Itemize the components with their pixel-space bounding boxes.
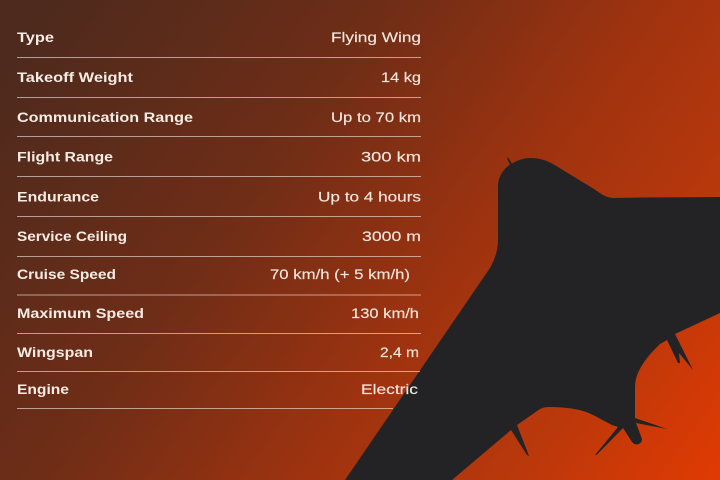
row: cruise speed [17, 267, 421, 295]
row: takeoff weight: 14 kg [381, 70, 421, 85]
row: flight range: Flight Range [17, 150, 114, 164]
row: maximum speed: 130 km/h [351, 306, 419, 321]
row: type: Type [17, 30, 55, 45]
row: flight range [17, 150, 421, 176]
row: engine: Engine [17, 382, 70, 397]
row: service ceiling: Service Ceiling [17, 229, 127, 244]
row: wingspan: 2,4 m [380, 345, 419, 360]
row: endurance [17, 190, 421, 216]
row: cruise speed: Cruise Speed [17, 267, 116, 282]
row: type: Flying Wing [331, 30, 421, 45]
spec table [17, 30, 421, 408]
row: communication range [17, 110, 421, 136]
row: flight range: 300 km [361, 150, 421, 164]
row: wingspan: Wingspan [17, 345, 93, 360]
row: service ceiling [17, 229, 421, 256]
drone silhouette [345, 158, 720, 480]
row: communication range: Communication Range [17, 110, 194, 125]
row: maximum speed: Maximum Speed [17, 306, 144, 321]
row: takeoff weight: Takeoff Weight [17, 70, 134, 85]
row: endurance: Up to 4 hours [318, 190, 421, 204]
row: takeoff weight [17, 70, 421, 98]
row: engine [17, 382, 418, 408]
row: communication range: Up to 70 km [331, 110, 421, 125]
row: cruise speed: 70 km/h (+ 5 km/h) [270, 267, 410, 282]
row: service ceiling: 3000 m [362, 229, 421, 244]
row: wingspan [17, 345, 420, 372]
row: engine: Electric [361, 382, 418, 397]
row: type [17, 30, 421, 58]
row: maximum speed [17, 306, 421, 334]
row: endurance: Endurance [17, 190, 100, 204]
